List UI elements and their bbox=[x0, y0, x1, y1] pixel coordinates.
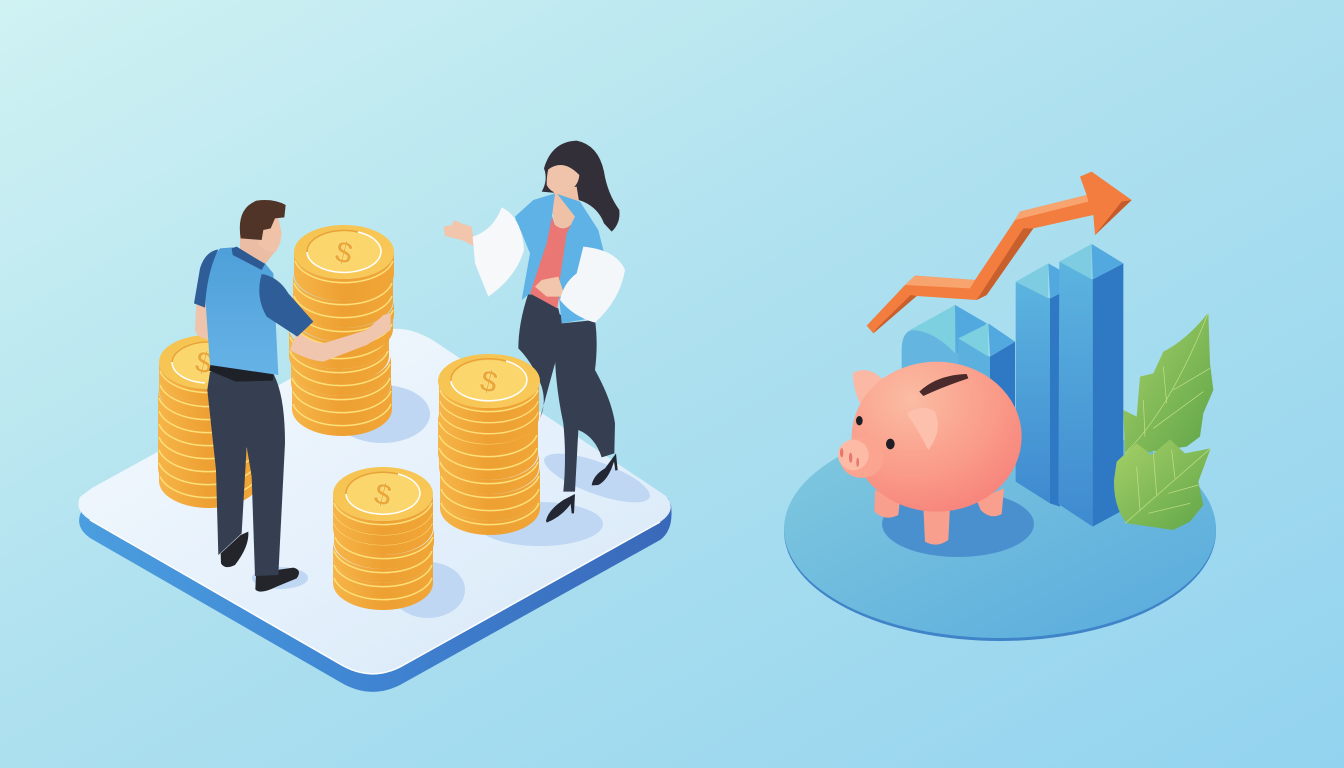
bar 1 bbox=[902, 305, 987, 393]
snout bbox=[838, 437, 884, 478]
platform bbox=[78, 329, 672, 692]
bar 2 bbox=[958, 323, 1015, 433]
coin stack: front: $ bbox=[370, 475, 395, 514]
woman legs bbox=[518, 293, 615, 492]
man left sleeve bbox=[194, 249, 218, 308]
far ear bbox=[853, 370, 889, 403]
person: man bbox=[194, 200, 391, 592]
bar chart bbox=[902, 244, 1123, 527]
coin stack: back centre: $ bbox=[331, 233, 356, 272]
man hair bbox=[240, 200, 286, 240]
upper leaf bbox=[1123, 313, 1213, 453]
woman shoes bbox=[546, 453, 618, 523]
man face bbox=[258, 217, 282, 252]
coin slot bbox=[919, 374, 968, 396]
bar 3 bbox=[1016, 263, 1060, 507]
coin stack: front bbox=[333, 467, 434, 610]
lower leaf bbox=[1114, 439, 1211, 530]
woman neck bbox=[552, 187, 580, 229]
man collar bbox=[232, 247, 265, 270]
piggy bank bbox=[838, 362, 1022, 545]
woman left hand bbox=[443, 220, 475, 247]
pig shadow bbox=[882, 491, 1034, 557]
coin stack: right: $ bbox=[476, 362, 501, 401]
disc platform bbox=[784, 420, 1216, 641]
coin stack: left bbox=[158, 335, 259, 508]
man right sleeve bbox=[259, 274, 313, 337]
coin stack: back centre bbox=[289, 225, 394, 436]
woman right hand bbox=[535, 277, 565, 297]
near ear bbox=[907, 408, 938, 450]
bar 4 bbox=[1058, 244, 1123, 527]
woman left sleeve bbox=[473, 207, 524, 297]
man shoes bbox=[221, 532, 299, 592]
man trousers bbox=[207, 372, 285, 576]
woman right sleeve bbox=[560, 247, 625, 323]
woman hair bbox=[542, 141, 620, 232]
pig eyes bbox=[856, 416, 895, 449]
man vest bbox=[203, 247, 278, 375]
man left arm bbox=[195, 297, 213, 340]
woman face bbox=[547, 165, 579, 193]
coin stack: right bbox=[438, 354, 540, 535]
arrow bbox=[867, 172, 1132, 333]
person: woman bbox=[443, 141, 625, 523]
woman top bbox=[530, 210, 571, 308]
man neck bbox=[240, 230, 275, 267]
man right arm bbox=[290, 313, 391, 362]
pig body bbox=[852, 362, 1022, 512]
pig legs bbox=[874, 488, 1004, 545]
leaves bbox=[1114, 313, 1213, 530]
man belt bbox=[209, 363, 274, 382]
woman jacket bbox=[498, 193, 605, 323]
coin stack: left: $ bbox=[191, 343, 216, 382]
coin shadows on platform bbox=[252, 385, 655, 618]
